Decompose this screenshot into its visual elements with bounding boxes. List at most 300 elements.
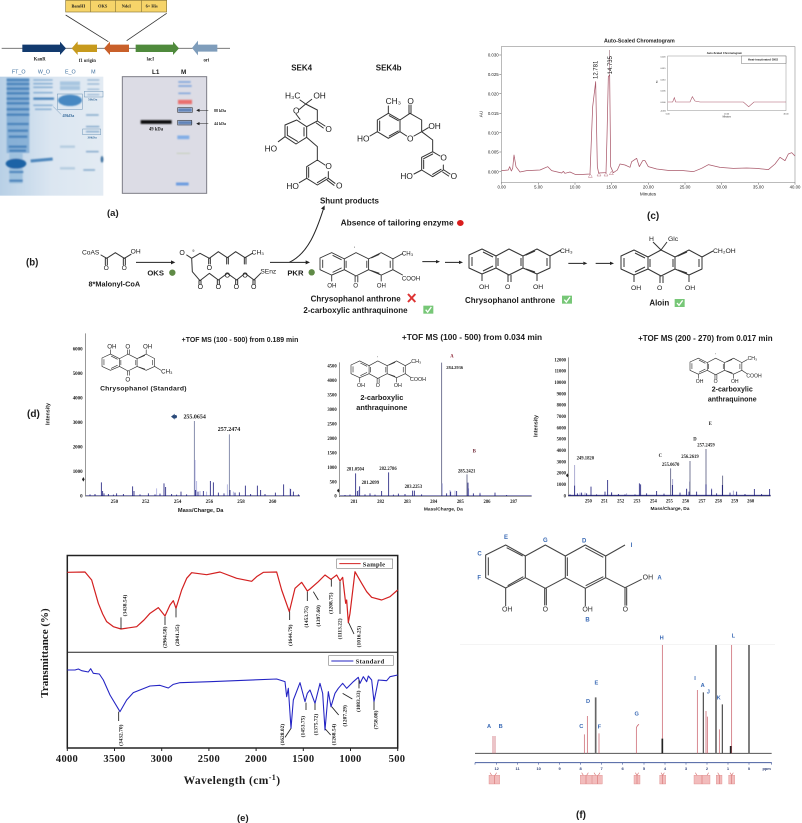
anthrone skeleton with proton letters: I [631, 543, 633, 549]
standard FTIR trace: (3432.70) [118, 724, 125, 746]
panel d1: chrysophanol standard spectrum [45, 333, 300, 514]
axes: 4000 [327, 379, 337, 384]
structure: 2-carboxylic anthraquinone (d2): OH [357, 383, 365, 389]
octaketide intermediate: O [198, 284, 204, 291]
SEK4 structure: O [325, 161, 332, 171]
octaketide intermediate: O [225, 273, 231, 280]
standard FTIR trace: (1268.54) [331, 724, 338, 745]
arrows to chrysophanol anthrone [422, 260, 463, 264]
malonyl-CoA [82, 249, 141, 289]
chromatogram axes: 0.030 [488, 53, 499, 58]
structure: 2-carboxylic anthraquinone (d3) [690, 352, 762, 404]
anthrone skeleton with proton letters: O [543, 607, 549, 614]
panel label c: (c) [647, 211, 659, 222]
peak labels: 255.0654 [183, 415, 206, 421]
axes: 4500 [327, 364, 337, 369]
FTIR frame and x axis: 3500 [103, 754, 126, 765]
structure: aloin: Glc [668, 236, 679, 243]
SEK4 structure: HO [265, 143, 278, 153]
western blot: M [181, 69, 186, 76]
chromatogram axes: 10.00 [570, 185, 581, 190]
peak labels: D [693, 437, 697, 442]
panel e: FTIR spectra [39, 556, 405, 787]
axes: Intensity [45, 403, 51, 425]
axes: 260 [747, 500, 755, 505]
SEK4b structure: HO [357, 133, 370, 143]
standard FTIR trace: (758.08) [372, 710, 379, 729]
inset chromatogram [656, 51, 789, 119]
chromatogram axes: 0.010 [488, 130, 499, 135]
panel label a: (a) [107, 208, 119, 219]
axes: 254 [174, 500, 182, 505]
panel f: NMR spectrum [460, 634, 775, 784]
plasmid insert boxes: 6× His [146, 4, 158, 9]
peak labels: E [709, 422, 712, 427]
chromatogram axes: 0.015 [488, 111, 499, 116]
chromatogram axes: 0.00 [497, 185, 506, 190]
axes: 5000 [73, 372, 83, 377]
axes: Mass/Charge, Da [424, 506, 463, 512]
axes: 260 [269, 500, 277, 505]
SEK4 structure: H₃C [285, 91, 300, 101]
structure: chrysophanol standard: O [125, 343, 130, 350]
NMR ppm axis: 11 [516, 766, 521, 771]
structure: 2-carboxylic anthraquinone (d3): O [714, 379, 718, 385]
SDS-PAGE gel: FT_O [12, 69, 25, 75]
axes: 9000 [557, 392, 567, 397]
malonyl-CoA: O [122, 265, 127, 272]
panel a: construct and gels [0, 0, 230, 196]
axes: 1000 [73, 470, 83, 475]
octaketide intermediate: O [234, 284, 240, 291]
chromatogram axes: 40.00 [790, 185, 801, 190]
sample FTIR trace: (1644.79) [287, 624, 294, 646]
western blot: L1 [152, 69, 160, 76]
chromatogram axes: 0.005 [488, 150, 499, 155]
malonyl-CoA: 8*Malonyl-CoA [88, 280, 141, 289]
peak labels: 14.735 [608, 55, 614, 74]
axes: 284 [430, 500, 438, 505]
peak labels: 285.2421 [458, 469, 476, 474]
chromatogram axes: 25.00 [680, 185, 691, 190]
structure: 2-carboxylic anthraquinone (d3): anthraquinone [708, 397, 757, 404]
peak labels [337, 355, 476, 493]
axes: 286 [484, 500, 491, 505]
spectrum title: +TOF MS (200 - 270) from 0.017 min [638, 334, 773, 343]
peak labels: A [450, 355, 454, 360]
chromatogram axes: 15.00 [606, 185, 618, 190]
axes: 1000 [327, 466, 337, 471]
axes: Intensity [533, 415, 539, 437]
peak labels: 249.1820 [577, 457, 595, 462]
axes: 3000 [327, 408, 337, 413]
NMR peak letters: L [732, 634, 736, 640]
structure: aloin [621, 236, 736, 292]
axes: 0 [80, 494, 83, 499]
inset chromatogram: 0.000 [661, 102, 666, 104]
SDS-PAGE gel: 49kDa [62, 113, 75, 118]
NMR ppm axis: 7 [601, 766, 604, 771]
SDS-PAGE gel: 30kDa [87, 136, 97, 140]
NMR peak letters: D [586, 699, 590, 705]
inset chromatogram: 0.010 [661, 79, 666, 81]
peak labels: 257.2474 [218, 427, 240, 433]
NMR ppm axis: 3 [685, 766, 688, 771]
SDS-PAGE gel [0, 69, 103, 196]
SEK4 structure [265, 64, 343, 191]
SDS-PAGE gel: M [91, 69, 96, 75]
structure: 2-carboxylic anthraquinone (d3): OH [731, 379, 739, 385]
FTIR frame and x axis: 2000 [245, 754, 267, 765]
peak labels: 283.2253 [405, 485, 423, 490]
axes: 4000 [557, 449, 567, 454]
axes: 2000 [73, 446, 83, 451]
anthrone skeleton with proton letters: A [657, 576, 662, 582]
octaketide intermediate: 9 [192, 249, 194, 253]
western blot: 49 kDa [149, 128, 164, 133]
panel f structure [477, 535, 662, 624]
chromatogram trace [502, 75, 795, 174]
structure: carboxylic anthrone intermediate: CH₃ [402, 250, 414, 257]
inset chromatogram: AU [656, 80, 659, 83]
inset chromatogram: Heat-inactivated OKS [748, 58, 778, 62]
anthrone skeleton with proton letters: OH [643, 575, 653, 582]
FTIR frame and x axis: 2500 [198, 754, 220, 765]
panel d3: anthraquinone spectrum [533, 334, 773, 512]
sample FTIR trace: (1113.22) [336, 618, 343, 639]
structure: aloin: H [649, 236, 654, 243]
panel label b: (b) [26, 258, 38, 269]
axes: 3000 [557, 460, 567, 465]
plasmid insert boxes [66, 0, 167, 12]
SEK4 structure: O [325, 124, 332, 134]
axes: 254 [650, 500, 657, 505]
axes: 252 [142, 500, 150, 505]
structure: chrysophanol standard: OH [107, 343, 116, 350]
FTIR frame and x axis: -1 [269, 773, 276, 782]
axes: 12000 [554, 358, 567, 363]
SEK4b structure: O [407, 96, 414, 106]
NMR ppm axis: 10 [536, 766, 542, 771]
octaketide intermediate: O [242, 273, 248, 280]
chromatogram axes: AU [479, 111, 484, 117]
compound label: 2-carboxylic anthraquinone: Chrysophanol anthrone [311, 294, 401, 303]
spectrum title: +TOF MS (100 - 500) from 0.189 min [182, 337, 298, 344]
structure: 2-carboxylic anthraquinone (d2): 2-carboxylic [360, 393, 403, 402]
structure: 2-carboxylic anthraquinone (d2): O [376, 383, 380, 389]
standard FTIR trace: (1083.33) [355, 690, 362, 712]
label: chrysophanol anthrone: Chrysophanol anthrone [465, 296, 556, 305]
inset chromatogram: Auto-Scaled Chromatogram [707, 51, 743, 55]
axes: 1000 [557, 483, 567, 488]
structure: carboxylic anthrone intermediate [320, 242, 420, 290]
octaketide intermediate [179, 249, 276, 291]
western blot [122, 69, 226, 193]
NMR peak letters: E [594, 680, 598, 686]
structure: 2-carboxylic anthraquinone (d2) [351, 354, 426, 412]
axes: 256 [682, 500, 690, 505]
anthrone skeleton with proton letters: O [623, 607, 629, 614]
structure: 2-carboxylic anthraquinone (d2): COOH [410, 377, 426, 383]
SEK4b structure: CH₃ [386, 96, 401, 106]
axes: 500 [330, 480, 337, 485]
axes: 258 [237, 500, 245, 505]
standard FTIR trace: (1207.29) [341, 705, 348, 727]
FTIR frame and x axis: ) [276, 775, 280, 787]
NMR peak letters: B [499, 724, 503, 730]
plasmid map genes: f1 origin [79, 59, 96, 64]
chromatogram axes: Minutes [640, 192, 657, 197]
axes: 2500 [327, 422, 337, 427]
sample FTIR trace: (2841.35) [174, 624, 181, 646]
NMR ppm axis: 6 [622, 766, 625, 771]
axes: 251 [601, 500, 608, 505]
SEK4b structure [357, 64, 458, 181]
structure: carboxylic anthrone intermediate: COOH [402, 275, 420, 282]
axes: 285 [457, 500, 464, 505]
standard FTIR trace: Standard [356, 658, 384, 665]
FTIR frame and x axis: 4000 [56, 754, 78, 765]
plasmid map genes [2, 13, 230, 64]
NMR ppm axis [475, 763, 772, 771]
structure: carboxylic anthrone intermediate: · [353, 242, 356, 251]
axes: 6000 [73, 348, 83, 353]
arrow: OKS step: OKS [147, 268, 164, 277]
axes: 256 [206, 500, 214, 505]
NMR peak letters: I [694, 676, 696, 682]
spectrum title: +TOF MS (100 - 500) from 0.034 min [402, 332, 542, 342]
chromatogram axes: 0.025 [488, 72, 499, 77]
axes: 257 [699, 500, 706, 505]
NMR peak letters [487, 634, 736, 731]
SEK4 structure: OH [313, 91, 326, 101]
NMR ppm axis: 2 [706, 766, 709, 771]
NMR peak letters: A [487, 724, 491, 730]
structure: chrysophanol standard [100, 343, 186, 392]
axes: 3000 [73, 421, 83, 426]
octaketide intermediate: O [179, 250, 185, 257]
structure: 2-carboxylic anthraquinone (d3): COOH [746, 373, 762, 379]
peak labels [566, 422, 715, 477]
SEK4b structure: HO [400, 171, 413, 181]
NMR peak letters: J [707, 689, 710, 695]
NMR ppm axis: ppm [762, 766, 771, 771]
structure: 2-carboxylic anthraquinone (d3): · [714, 352, 716, 358]
NMR integrals [489, 773, 735, 784]
shunt products label: Shunt products [320, 197, 380, 206]
structure: 2-carboxylic anthraquinone (d2): CH₃ [411, 359, 421, 365]
axes: 4000 [73, 397, 83, 402]
inset chromatogram: 0.00 [666, 114, 670, 116]
peak labels: C [659, 454, 663, 459]
NMR ppm axis: 4 [664, 766, 667, 771]
SEK4 structure: O [293, 105, 300, 115]
axes: 283 [404, 500, 411, 505]
chromatogram axes: 35.00 [753, 185, 764, 190]
inset chromatogram: 0.015 [661, 68, 666, 70]
anthrone skeleton with proton letters: G [543, 538, 548, 544]
peak labels [588, 50, 614, 177]
anthrone skeleton with proton letters: C [477, 552, 482, 558]
peak labels: 281.2099 [362, 481, 380, 486]
peak labels: 256.2619 [681, 455, 699, 460]
anthrone skeleton with proton letters [477, 535, 662, 624]
axes: 255 [666, 500, 673, 505]
malonyl-CoA: OH [131, 249, 141, 256]
SEK4b structure: O [407, 133, 414, 143]
FTIR frame and x axis: 3000 [151, 754, 173, 765]
octaketide intermediate: O [251, 284, 257, 291]
axes: 0 [564, 494, 567, 499]
structure: chrysophanol standard: Chrysophanol (Standard) [100, 385, 187, 392]
structure: 2-carboxylic anthraquinone (d2): anthraquinone [356, 403, 407, 412]
structure: chrysophanol standard: CH₃ [161, 369, 173, 376]
structure: carboxylic anthrone intermediate: OH [377, 283, 386, 290]
malonyl-CoA: CoAS [82, 249, 100, 256]
structure: chrysophanol anthrone: CH₃ [560, 248, 573, 255]
plasmid insert boxes: BamHI [71, 4, 85, 9]
axes: 281 [351, 500, 358, 505]
sample FTIR trace: Sample [363, 561, 385, 568]
FTIR frame and x axis: 1000 [339, 754, 362, 765]
peak labels [82, 414, 240, 482]
panel label f: (f) [576, 810, 586, 821]
FTIR frame and x axis: 1500 [292, 754, 314, 765]
peak labels: 282.2786 [379, 467, 397, 472]
spectrum peaks [340, 363, 532, 496]
SDS-PAGE gel: E_O [65, 69, 76, 75]
structure: chrysophanol anthrone: O [505, 284, 510, 291]
octaketide intermediate: O [216, 284, 222, 291]
sample FTIR trace: (1397.60) [315, 605, 322, 627]
FTIR frame and x axis [56, 556, 405, 787]
peak labels: B [473, 449, 476, 454]
panel d2: anthraquinone spectrum [327, 332, 542, 512]
axes: Mass/Charge, Da [651, 506, 690, 512]
plasmid insert boxes: OKS [98, 4, 108, 9]
axes: 6000 [557, 426, 567, 431]
standard FTIR trace: (1375.72) [312, 714, 319, 735]
chromatogram axes: 0.020 [488, 91, 499, 96]
SEK4 structure: SEK4 [291, 64, 313, 73]
anthrone skeleton with proton letters: OH [502, 606, 512, 613]
FTIR frame and x axis: 500 [389, 754, 405, 765]
axes: Mass/Charge, Da [178, 508, 224, 514]
chromatogram axes: 30.00 [716, 185, 728, 190]
SEK4b structure: OH [428, 121, 441, 131]
axes: 253 [634, 500, 641, 505]
compound label: 2-carboxylic anthraquinone: 2-carboxylic anthraquinone [303, 306, 408, 315]
structure: 2-carboxylic anthraquinone (d3): 2-carboxylic [712, 386, 753, 393]
axes: 282 [377, 500, 385, 505]
axes: 5000 [557, 438, 567, 443]
anthrone skeleton with proton letters: D [582, 539, 587, 545]
chromatogram axes: 0.000 [488, 169, 499, 174]
structure: chrysophanol standard: O [125, 376, 130, 383]
axes: 10000 [554, 381, 567, 386]
chromatogram axes: 5.00 [534, 185, 543, 190]
plasmid map genes: lacI [147, 58, 154, 63]
standard FTIR trace: (1628.02) [279, 724, 286, 745]
axes: 3500 [327, 393, 337, 398]
spectrum peaks [568, 449, 771, 496]
inset chromatogram: 40.00 [784, 114, 789, 116]
sample FTIR trace: (3438.54) [121, 595, 128, 616]
axes: 0 [334, 495, 337, 500]
inset chromatogram: 0.020 [661, 57, 666, 59]
structure: chrysophanol anthrone: OH [533, 284, 543, 291]
chromatogram axes: 20.00 [643, 185, 654, 190]
label: aloin: Aloin [649, 298, 669, 307]
spectrum peaks [86, 421, 300, 496]
western blot: 88 kDa [214, 108, 226, 113]
inset chromatogram: 0.005 [661, 91, 666, 93]
SEK4b structure: O [451, 171, 458, 181]
compound label: 2-carboxylic anthraquinone [303, 294, 433, 315]
plasmid map genes: KanR [34, 58, 46, 63]
arrows to aloin [568, 262, 614, 265]
structure: aloin: OH [685, 285, 695, 292]
structure: chrysophanol standard: OH [143, 343, 152, 350]
axes: 259 [731, 500, 739, 505]
axes: 258 [715, 500, 722, 505]
NMR peaks [460, 644, 775, 753]
plasmid map genes: ori [203, 58, 210, 63]
SEK4 structure: O [336, 181, 343, 191]
sample FTIR trace: (1208.75) [328, 592, 335, 614]
SDS-PAGE gel: W_O [38, 69, 50, 75]
NMR ppm axis: 9 [559, 766, 562, 771]
axes: 250 [585, 500, 592, 505]
octaketide intermediate: CH₃ [252, 250, 264, 257]
inset chromatogram: Minutes [723, 116, 732, 119]
structure: 2-carboxylic anthraquinone (d2): OH [394, 383, 402, 389]
inset chromatogram: 20.00 [724, 114, 730, 116]
sample FTIR trace: (2964.58) [162, 626, 169, 648]
peak labels: 284.2936 [446, 365, 464, 370]
SEK4 structure: HO [286, 181, 299, 191]
octaketide intermediate: SEnz [260, 268, 276, 275]
peak labels: 257.2459 [697, 443, 715, 448]
structure: aloin: CH₂OH [713, 248, 736, 255]
axes: 7000 [557, 415, 567, 420]
axes: 2000 [557, 472, 567, 477]
axes: 1500 [327, 451, 337, 456]
panel c: chromatogram [479, 38, 801, 197]
anthrone skeleton with proton letters: F [477, 575, 481, 581]
FTIR frame and x axis: Wavelength (cm [184, 775, 269, 787]
axes: 11000 [555, 370, 567, 375]
NMR peak letters: H [660, 635, 664, 641]
NMR ppm axis: 0 [748, 766, 751, 771]
panel: SEK shunt products [265, 64, 458, 191]
axes [45, 333, 300, 514]
y axis label: Transmittance (%) [39, 608, 51, 698]
octaketide intermediate: O [207, 265, 213, 272]
structure: chrysophanol anthrone: OH [479, 284, 489, 291]
label: aloin [649, 298, 685, 307]
NMR peak letters: K [717, 695, 722, 701]
standard FTIR trace [67, 656, 398, 746]
sample FTIR trace [67, 559, 398, 648]
axes [327, 362, 532, 512]
panel b: biosynthetic pathway [26, 197, 685, 315]
structure: 2-carboxylic anthraquinone (d2): · [376, 354, 378, 360]
NMR peak letters: G [634, 711, 639, 717]
chromatogram axes [479, 47, 801, 197]
NMR peak letters: C [579, 724, 583, 730]
SDS-PAGE gel: 50kDa [88, 97, 98, 101]
